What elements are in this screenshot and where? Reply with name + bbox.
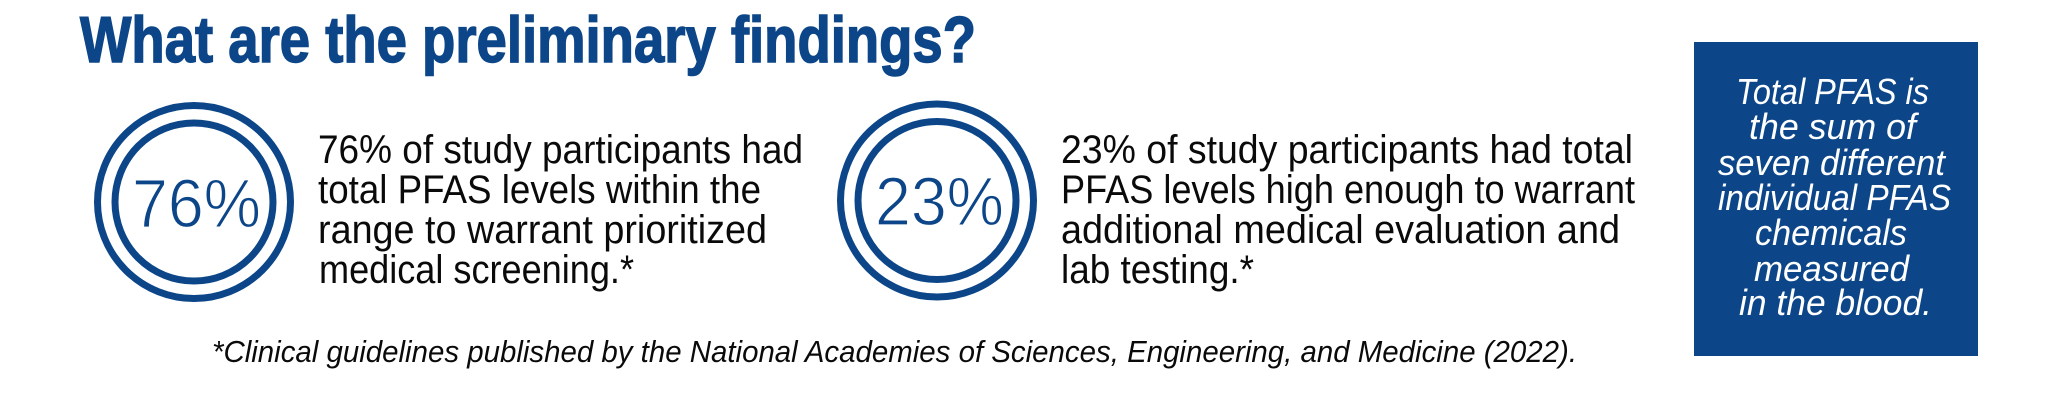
panel text: individual PFAS bbox=[1718, 177, 1951, 218]
stat value 76%: 76% bbox=[132, 165, 261, 242]
text block: 76 percent description bbox=[318, 128, 803, 292]
footnote: *Clinical guidelines published by the National Academies of Sciences, Engineering, and Medicine (2022). bbox=[212, 334, 1577, 369]
panel text: the sum of bbox=[1749, 106, 1920, 147]
panel background bbox=[1694, 42, 1978, 356]
stat value 23%: 23% bbox=[875, 163, 1004, 240]
panel: total PFAS definition bbox=[1694, 42, 1978, 356]
icon: double ring 76 bbox=[98, 106, 290, 298]
text block: 23 percent description: 23% of study participants had total bbox=[1061, 128, 1633, 172]
panel text: Total PFAS is bbox=[1736, 71, 1929, 112]
text block: 23 percent description: additional medical evaluation and bbox=[1061, 208, 1620, 252]
text block: 23 percent description: PFAS levels high enough to warrant bbox=[1061, 168, 1635, 212]
text block: 76 percent description: medical screening.* bbox=[319, 248, 634, 292]
panel text: in the blood. bbox=[1739, 282, 1932, 323]
panel text: seven different bbox=[1718, 142, 1947, 183]
text block: 76 percent description: 76% of study participants had bbox=[318, 128, 803, 172]
panel text: measured bbox=[1754, 248, 1910, 289]
panel text bbox=[1718, 71, 1951, 323]
text block: 76 percent description: total PFAS levels within the bbox=[318, 168, 761, 212]
title: What are the preliminary findings? bbox=[80, 3, 976, 76]
text block: 23 percent description bbox=[1061, 128, 1635, 292]
stat: 23 percent bbox=[840, 104, 1635, 297]
text block: 76 percent description: range to warrant prioritized bbox=[318, 208, 767, 252]
panel text: chemicals bbox=[1755, 212, 1907, 253]
text block: 23 percent description: lab testing.* bbox=[1061, 248, 1254, 292]
icon: double ring 23 bbox=[840, 104, 1034, 297]
stat: 76 percent bbox=[98, 106, 803, 298]
